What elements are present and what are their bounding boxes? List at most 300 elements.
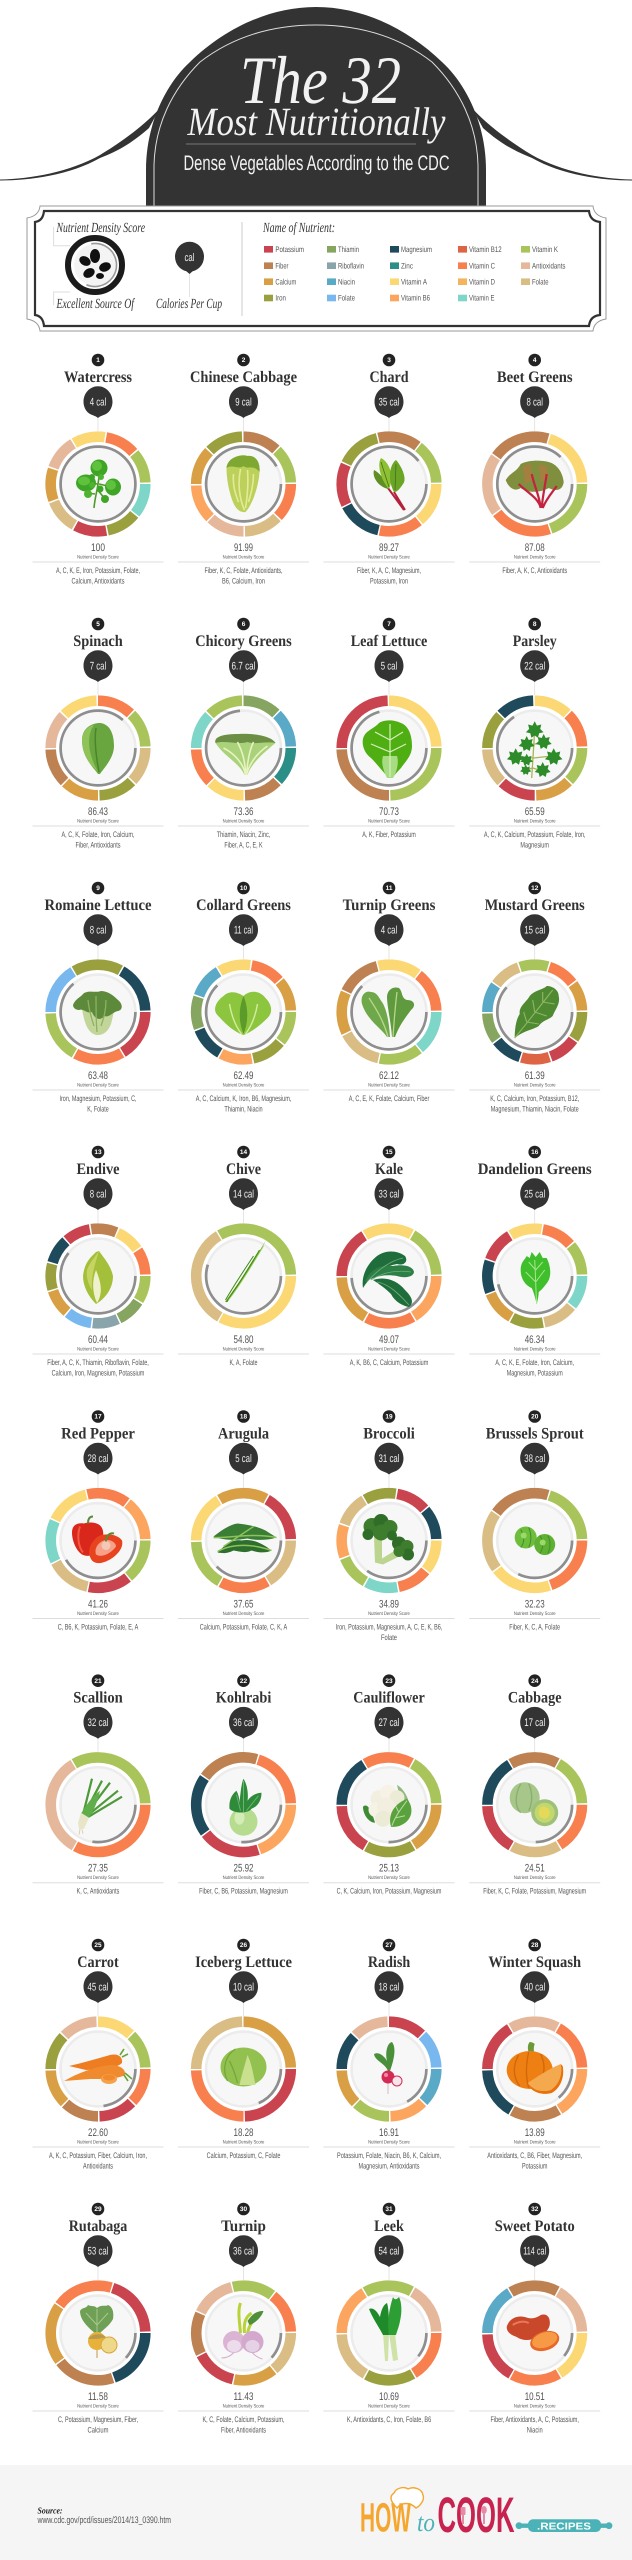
excellent source of list [217,830,270,850]
vegetable 11: Turnip Greens: Turnip Greens [343,897,435,914]
excellent source of list: B6, Calcium, Iron [222,577,265,586]
vegetable 2: Chinese Cabbage [177,354,310,586]
vegetable 25: Carrot: Nutrient Density Score [77,2139,119,2145]
vegetable 29: Rutabaga: 29 [94,2206,102,2213]
vegetable 18: Arugula [178,1410,309,1632]
vegetable 25: Carrot: Carrot [77,1954,119,1971]
excellent source of list: A, K, B6, C, Calcium, Potassium [350,1358,429,1367]
excellent source of list: K, C, Folate, Calcium, Potassium, [202,2415,284,2424]
vegetable 24: Cabbage [469,1674,600,1896]
nutrient ring [31,417,165,551]
excellent source of list [204,566,282,586]
vegetable 29: Rutabaga: 11.58 [88,2391,108,2403]
icon: watercress [76,460,121,508]
nutrient ring [32,2267,164,2399]
excellent source of list: Potassium, Folate, Niacin, B6, K, Calcium, [337,2151,441,2160]
icon: leek [369,2297,401,2361]
excellent source of list: Iron, Potassium, Magnesium, A, C, E, K, B6, [336,1622,442,1632]
legend: nutrient colour key: Potassium [275,245,304,254]
excellent source of list [196,1094,291,1114]
legend: nutrient density score label: Nutrient Density Score [56,221,145,236]
excellent source of list: Fiber, A, C, K, Thiamin, Riboflavin, Folate, [47,1358,149,1367]
icon: spinach [82,723,114,774]
legend: nutrient colour key [264,245,566,303]
icon: cabbage [510,1782,558,1826]
vegetable 12: Mustard Greens [469,882,601,1114]
excellent source of list: A, C, Calcium, K, Iron, B6, Magnesium, [196,1094,291,1103]
title: Most Nutritionally [187,99,446,144]
vegetable 5: Spinach: Nutrient Density Score [77,818,119,824]
nutrient ring [323,418,455,550]
vegetable 9: Romaine Lettuce: 9 [96,885,100,892]
vegetable 6: Chicory Greens: Chicory Greens [195,633,292,650]
vegetable 26: Iceberg Lettuce: 18.28 [234,2127,254,2139]
vegetable 22: Kohlrabi [177,1674,310,1896]
vegetable 12: Mustard Greens: 15 cal [524,924,545,936]
nutrient ring [468,681,602,815]
vegetable 31: Leek [324,2203,454,2424]
vegetable 17: Red Pepper: Nutrient Density Score [77,1611,119,1617]
vegetable 15: Kale: Nutrient Density Score [368,1346,410,1352]
icon: chicory greens [215,734,276,775]
nutrient ring [31,2002,165,2136]
nutrient ring [324,2268,454,2398]
vegetable 22: Kohlrabi: Kohlrabi [216,1690,272,1707]
legend: nutrient colour key: Iron [275,294,286,303]
icon: radish [374,2042,402,2094]
nutrient ring [179,1211,308,1341]
nutrient ring [179,1476,308,1605]
vegetable 23: Cauliflower: 25.13 [379,1863,399,1875]
excellent source of list: C, B6, K, Potassium, Folate, E, A [58,1622,139,1632]
vegetable 16: Dandelion Greens: 46.34 [525,1334,545,1346]
legend: calories label: Calories Per Cup [156,297,222,312]
vegetable 23: Cauliflower: Cauliflower [353,1690,425,1707]
vegetable 9: Romaine Lettuce [32,882,164,1114]
icon: romaine lettuce [73,991,122,1035]
excellent source of list: Antioxidants [83,2162,113,2171]
vegetable 7: Leaf Lettuce [324,618,454,839]
vegetable 12: Mustard Greens: 12 [531,885,539,892]
vegetable 32: Sweet Potato: Nutrient Density Score [514,2403,556,2409]
vegetable 5: Spinach [31,618,165,850]
vegetable 7: Leaf Lettuce: 7 [387,621,391,628]
vegetable 27: Radish: 18 cal [378,1981,400,1993]
excellent source of list [202,2415,284,2435]
vegetable 29: Rutabaga: Nutrient Density Score [77,2403,119,2409]
nutrient ring [33,1740,163,1869]
vegetable 20: Brussels Sprout: 38 cal [524,1453,545,1465]
excellent source of list [495,1358,574,1378]
icon: endive [83,1251,113,1304]
vegetable 18: Arugula: 5 cal [235,1453,252,1465]
vegetable 25: Carrot: 25 [94,1942,102,1949]
excellent source of list: A, C, K, E, Folate, Iron, Calcium, [495,1358,574,1367]
vegetable 20: Brussels Sprout: 20 [531,1414,539,1421]
panel: legend [27,206,606,331]
legend: nutrient colour key: Vitamin K [532,245,559,254]
excellent source of list [60,1094,136,1114]
legend: sample ring icon [68,238,122,292]
vegetable 7: Leaf Lettuce: 5 cal [381,660,397,672]
vegetable 29: Rutabaga [32,2203,164,2435]
vegetable 18: Arugula: Arugula [218,1426,269,1442]
vegetable 9: Romaine Lettuce: 63.48 [88,1070,108,1082]
legend: calorie balloon icon [175,242,204,297]
vegetable 14: Chive: 14 cal [233,1188,254,1200]
excellent source of list: Fiber, Antioxidants, A, C, Potassium, [491,2415,579,2424]
excellent source of list: Calcium, Potassium, C, Folate [207,2151,281,2160]
vegetable 11: Turnip Greens [323,882,455,1103]
vegetable 4: Beet Greens: 8 cal [526,396,543,408]
vegetable 31: Leek: Nutrient Density Score [368,2403,410,2409]
vegetable 29: Rutabaga: 53 cal [88,2245,108,2257]
vegetable 13: Endive [31,1146,165,1378]
icon: collard greens [215,992,271,1035]
legend: calorie balloon icon: cal [184,252,194,264]
excellent source of list: Iron, Magnesium, Potassium, C, [60,1094,136,1103]
vegetable 11: Turnip Greens: 11 [386,885,393,892]
vegetable 29: Rutabaga: Rutabaga [69,2218,127,2235]
legend: nutrient colour key: Riboflavin [338,261,364,270]
icon: cauliflower [363,1785,411,1827]
legend: nutrient colour key: Vitamin E [469,294,494,303]
nutrient ring [323,946,455,1078]
logo: How to Cook Recipes [360,2487,612,2543]
nutrient ring [33,947,163,1077]
excellent source of list: Magnesium, Antioxidants [358,2162,420,2171]
legend: nutrient colour key: Thiamin [338,245,359,254]
excellent source of list: A, C, K, Folate, Iron, Calcium, [62,830,134,839]
vegetable 18: Arugula: Nutrient Density Score [223,1611,265,1617]
vegetable 24: Cabbage: 24.51 [525,1863,545,1875]
excellent source of list: Fiber, Antioxidants [76,841,120,850]
vegetable 32: Sweet Potato [469,2203,600,2435]
vegetable 9: Romaine Lettuce: 8 cal [90,924,106,936]
header: dark dome banner [0,7,632,206]
vegetable 27: Radish: Nutrient Density Score [368,2139,410,2145]
vegetable 19: Broccoli: Nutrient Density Score [368,1611,410,1617]
excellent source of list: Fiber, K, A, C, Magnesium, [357,566,421,575]
vegetable 7: Leaf Lettuce: Leaf Lettuce [351,633,427,650]
vegetable 5: Spinach: 86.43 [88,806,108,818]
excellent source of list: Fiber, Antioxidants [221,2426,266,2435]
excellent source of list: Calcium, Antioxidants [72,577,124,586]
vegetable 32: Sweet Potato: 114 cal [523,2245,546,2257]
vegetable 24: Cabbage: Nutrient Density Score [514,1875,556,1881]
vegetable 27: Radish [322,1939,456,2171]
nutrient ring [31,681,165,815]
vegetable 11: Turnip Greens: Nutrient Density Score [368,1082,410,1088]
icon: rolling pin [516,2524,612,2528]
vegetable 16: Dandelion Greens: 25 cal [524,1188,545,1200]
icon: chard [374,458,405,510]
legend: nutrient colour key: Calcium [275,277,297,286]
vegetable 24: Cabbage: 24 [531,1678,539,1685]
vegetable 4: Beet Greens [469,354,601,575]
icon: kohlrabi [229,1779,262,1836]
legend: nutrient colour key: Niacin [338,277,355,286]
title: The 32 [240,42,401,118]
vegetable 1: Watercress: 1 [96,357,100,364]
excellent source of list: K, Folate [87,1105,109,1114]
vegetable 17: Red Pepper: 28 cal [88,1453,108,1465]
vegetable 30: Turnip: 11.43 [234,2391,254,2403]
icon: brussels sprout [515,1526,555,1555]
vegetable 1: Watercress: 4 cal [90,396,106,408]
vegetable 27: Radish: Radish [368,1954,410,1971]
legend: nutrient colour key: Zinc [401,261,413,270]
logo: How to Cook Recipes: to [417,2508,435,2537]
vegetable 8: Parsley: 8 [533,621,537,628]
vegetable 6: Chicory Greens: 73.36 [234,806,254,818]
excellent source of list: A, K, C, Potassium, Fiber, Calcium, Iron, [49,2151,147,2160]
vegetable 16: Dandelion Greens [468,1146,601,1378]
vegetable 27: Radish: 27 [385,1942,393,1949]
vegetable 23: Cauliflower [324,1674,454,1896]
vegetable 6: Chicory Greens: Nutrient Density Score [223,818,265,824]
nutrient ring [470,2268,599,2398]
nutrient ring [177,945,310,1079]
vegetable 8: Parsley: Nutrient Density Score [514,818,556,824]
vegetable 24: Cabbage: Cabbage [508,1690,562,1707]
excellent source of list: Thiamin, Niacin, Zinc, [217,830,270,839]
vegetable 20: Brussels Sprout: 32.23 [525,1598,545,1610]
nutrient ring [342,701,436,795]
vegetable 25: Carrot: 22.60 [88,2127,108,2139]
vegetable 10: Collard Greens [177,882,310,1114]
icon: dandelion greens [521,1252,550,1304]
vegetable 5: Spinach: 5 [96,621,100,628]
vegetable 12: Mustard Greens: Nutrient Density Score [514,1082,556,1088]
vegetable 22: Kohlrabi: 25.92 [234,1863,254,1875]
source text: www.cdc.gov/pcd/issues/2014/13_0390.htm [37,2515,171,2526]
vegetable 31: Leek: Leek [374,2218,404,2235]
vegetable 14: Chive: 14 [240,1149,247,1156]
vegetable 7: Leaf Lettuce: Nutrient Density Score [368,818,410,824]
icon: scallion [78,1779,122,1835]
vegetable 30: Turnip: 36 cal [233,2245,254,2257]
vegetable 15: Kale: Kale [375,1161,403,1178]
nutrient ring [196,2022,291,2116]
icon: beet greens [506,461,564,508]
nutrient ring [31,1209,165,1343]
nutrient ring [177,1739,310,1871]
vegetable 10: Collard Greens: Nutrient Density Score [223,1082,265,1088]
vegetable 13: Endive: Nutrient Density Score [77,1346,119,1352]
vegetable 32: Sweet Potato: 32 [531,2206,539,2213]
excellent source of list: Calcium, Iron, Magnesium, Potassium [52,1369,145,1378]
vegetable 13: Endive: 60.44 [88,1334,108,1346]
legend: nutrient colour key: Fiber [275,261,289,270]
vegetable 4: Beet Greens: 87.08 [525,542,545,554]
vegetable 18: Arugula: 37.65 [234,1598,254,1610]
excellent source of list: K, C, Antioxidants [77,1887,119,1896]
source text [37,2505,171,2526]
nutrient ring [469,1474,601,1607]
legend: nutrient colour key: Vitamin C [469,261,495,270]
vegetable 3: Chard: 89.27 [379,542,399,554]
legend: nutrient colour key: Vitamin D [469,277,495,286]
excellent source of list: K, Antioxidants, C, Iron, Folate, B6 [347,2415,432,2424]
excellent source of list: Calcium, Potassium, Folate, C, K, A [200,1622,288,1632]
vegetable 15: Kale: 33 cal [378,1188,400,1200]
vegetable 20: Brussels Sprout: Brussels Sprout [486,1426,584,1442]
vegetable 3: Chard: Nutrient Density Score [368,554,410,560]
excellent source of list: K, A, Folate [230,1358,258,1367]
vegetable 4: Beet Greens: Nutrient Density Score [514,554,556,560]
logo: How to Cook Recipes: .RECIPES [537,2522,591,2533]
vegetable 32: Sweet Potato: Sweet Potato [495,2218,575,2235]
vegetable 12: Mustard Greens: 61.39 [525,1070,545,1082]
vegetable 9: Romaine Lettuce: Nutrient Density Score [77,1082,119,1088]
vegetable 2: Chinese Cabbage: Nutrient Density Score [223,554,265,560]
vegetable 30: Turnip: Turnip [221,2218,266,2235]
icon: kale [363,1252,414,1307]
icon: arugula [214,1524,276,1553]
vegetable 21: Scallion: 32 cal [88,1717,108,1729]
vegetable 27: Radish: 16.91 [379,2127,399,2139]
vegetable 15: Kale: 15 [385,1149,393,1156]
excellent source of list [62,830,134,850]
vegetable 23: Cauliflower: 27 cal [378,1717,400,1729]
vegetable 14: Chive: Nutrient Density Score [223,1346,265,1352]
nutrient ring [177,2267,310,2399]
vegetable 11: Turnip Greens: 4 cal [381,924,397,936]
excellent source of list: Calcium [88,2426,109,2435]
nutrient ring [324,1211,454,1341]
vegetable 26: Iceberg Lettuce [178,1939,309,2160]
vegetable 17: Red Pepper: 41.26 [88,1598,108,1610]
vegetable 25: Carrot [31,1939,165,2171]
vegetable 16: Dandelion Greens: Nutrient Density Score [514,1346,556,1352]
vegetable 13: Endive: 13 [94,1149,102,1156]
icon: parsley [507,721,562,778]
excellent source of list [484,830,586,850]
vegetable 13: Endive: Endive [76,1161,120,1178]
nutrient ring [470,1740,599,1869]
vegetable 6: Chicory Greens [177,618,310,850]
excellent source of list: Thiamin, Niacin [224,1105,263,1114]
vegetable 8: Parsley: 22 cal [524,660,545,672]
vegetable 30: Turnip [177,2203,310,2435]
vegetable 28: Winter Squash: 13.89 [525,2127,545,2139]
icon: leaf lettuce [363,720,412,778]
legend: nutrient names heading: Name of Nutrient: [262,221,335,236]
vegetable 13: Endive: 8 cal [90,1188,106,1200]
logo: How to Cook Recipes: HOW [360,2495,411,2541]
excellent source of list [47,1358,149,1378]
vegetable 15: Kale: 49.07 [379,1334,399,1346]
excellent source of list: Fiber, K, C, Folate, Potassium, Magnesium [483,1887,586,1896]
vegetable 1: Watercress [31,354,165,586]
vegetable 28: Winter Squash: 40 cal [524,1981,545,1993]
excellent source of list: Potassium [522,2162,548,2171]
vegetable 28: Winter Squash: 28 [531,1942,539,1949]
excellent source of list: A, C, K, E, Iron, Potassium, Folate, [56,566,140,575]
excellent source of list [336,1622,442,1642]
icon: iceberg lettuce [220,2048,266,2086]
excellent source of list: A, C, E, K, Folate, Calcium, Fiber [349,1094,430,1103]
nutrient ring [177,417,310,551]
vegetable 6: Chicory Greens: 6 [242,621,246,628]
nutrient ring [469,946,601,1078]
vegetable 21: Scallion: 27.35 [88,1863,108,1875]
legend: nutrient colour key: Magnesium [401,245,432,254]
vegetable 8: Parsley: Parsley [513,633,557,650]
vegetable 2: Chinese Cabbage: 2 [242,357,246,364]
legend: nutrient colour key: Folate [338,294,355,303]
vegetable 15: Kale [324,1146,454,1367]
nutrient ring [469,418,601,550]
legend: connector lines [54,227,70,305]
icon: rutabaga [80,2305,117,2358]
vegetable 19: Broccoli: Broccoli [363,1426,415,1442]
icon: carrot [64,2049,132,2084]
vegetable 30: Turnip: Nutrient Density Score [223,2403,265,2409]
vegetable 31: Leek: 10.69 [379,2391,399,2403]
vegetable 9: Romaine Lettuce: Romaine Lettuce [44,897,152,914]
vegetable 25: Carrot: 45 cal [88,1981,108,1993]
vegetable 3: Chard [323,354,455,586]
vegetable 28: Winter Squash: Winter Squash [488,1954,581,1971]
vegetable 14: Chive: 54.80 [234,1334,254,1346]
excellent source of list [49,2151,147,2171]
vegetable 21: Scallion: Nutrient Density Score [77,1875,119,1881]
excellent source of list: A, C, K, Calcium, Potassium, Folate, Iron, [484,830,586,839]
vegetable 30: Turnip: 30 [240,2206,247,2213]
excellent source of list: Magnesium, Potassium [507,1369,563,1378]
vegetable 12: Mustard Greens: Mustard Greens [485,897,585,914]
nutrient ring [32,1474,164,1607]
vegetable 10: Collard Greens: Collard Greens [196,897,291,914]
excellent source of list: Antioxidants, C, B6, Fiber, Magnesium, [487,2151,582,2160]
vegetable 26: Iceberg Lettuce: 26 [240,1942,247,1949]
vegetable 19: Broccoli: 34.89 [379,1598,399,1610]
excellent source of list: Fiber, C, B6, Potassium, Magnesium [199,1887,288,1896]
vegetable 22: Kohlrabi: Nutrient Density Score [223,1875,265,1881]
excellent source of list: Niacin [527,2426,543,2435]
title: Dense Vegetables According to the CDC [184,152,450,175]
vegetable 26: Iceberg Lettuce: Nutrient Density Score [223,2139,265,2145]
vegetable 14: Chive: Chive [226,1161,261,1178]
icon: turnip greens [362,987,414,1037]
vegetable 10: Collard Greens: 11 cal [234,924,253,936]
vegetable 8: Parsley: 65.59 [525,806,545,818]
excellent source of list: Fiber, K, C, Folate, Antioxidants, [204,566,282,575]
nutrient ring [322,2002,456,2136]
vegetable 11: Turnip Greens: 62.12 [379,1070,399,1082]
vegetable 3: Chard: 3 [387,357,391,364]
excellent source of list: Potassium, Iron [370,577,408,586]
legend: excellent source label: Excellent Source Of [56,297,135,312]
nutrient ring [324,1740,454,1869]
legend: nutrient colour key: Vitamin B6 [401,294,430,303]
vegetable 16: Dandelion Greens: Dandelion Greens [478,1161,592,1178]
icon: turnip [222,2303,264,2359]
legend: nutrient colour key: Vitamin B12 [469,245,502,254]
vegetable 32: Sweet Potato: 10.51 [525,2391,545,2403]
vegetable 2: Chinese Cabbage: 9 cal [235,396,252,408]
excellent source of list [491,2415,579,2435]
excellent source of list [58,2415,138,2435]
vegetable 19: Broccoli [322,1410,456,1642]
vegetable 17: Red Pepper [32,1410,164,1632]
vegetable 26: Iceberg Lettuce: 10 cal [233,1981,254,1993]
vegetable 31: Leek: 54 cal [378,2245,400,2257]
excellent source of list [487,2151,582,2171]
vegetable 19: Broccoli: 19 [385,1414,393,1421]
